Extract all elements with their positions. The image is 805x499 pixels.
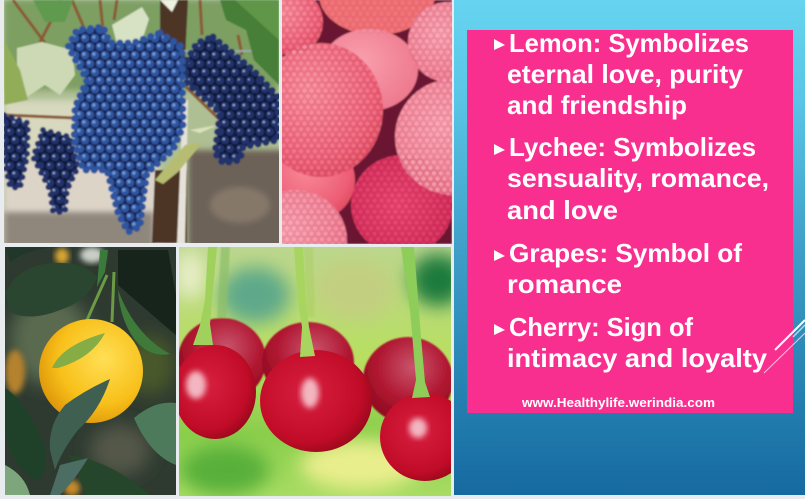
bullet: lychee: and love bbox=[507, 195, 618, 225]
lychee fruits bbox=[282, 0, 452, 244]
leaves bbox=[4, 0, 279, 184]
bullet: lychee: Lychee: Symbolizes bbox=[509, 132, 756, 162]
bullet: lemon: eternal love, purity bbox=[507, 59, 744, 89]
blue gradient background bbox=[454, 0, 805, 495]
website url: www.Healthylife.werindia.com bbox=[521, 395, 715, 410]
photo: cherries bbox=[174, 247, 470, 496]
front cherries bbox=[174, 247, 470, 481]
bullet: lychee: sensuality, romance, bbox=[507, 163, 769, 193]
lemon fruit bbox=[39, 319, 143, 423]
bullet: lychee bbox=[494, 132, 769, 225]
photo: lemon bbox=[5, 247, 176, 496]
lower leaves bbox=[5, 333, 176, 495]
bullet: grapes bbox=[494, 238, 742, 299]
bullet: cherry: Cherry: Sign of bbox=[509, 312, 693, 342]
pink text panel bbox=[467, 28, 793, 413]
photo: grapes bbox=[4, 0, 288, 250]
bullet: grapes: Grapes: Symbol of bbox=[509, 238, 742, 268]
decorative corner lines bbox=[764, 320, 805, 373]
bullet: lemon bbox=[494, 28, 749, 120]
bullet: lemon: Lemon: Symbolizes bbox=[509, 28, 749, 58]
back cherries bbox=[178, 247, 453, 423]
bullet: lemon: and friendship bbox=[507, 90, 687, 120]
upper leaves and stems bbox=[5, 247, 176, 355]
bullet: grapes: romance bbox=[507, 269, 622, 299]
bullet: cherry bbox=[494, 312, 768, 373]
bullet: cherry: intimacy and loyalty bbox=[507, 343, 768, 373]
grape clusters bbox=[4, 27, 278, 232]
photo: lychee bbox=[282, 0, 452, 244]
